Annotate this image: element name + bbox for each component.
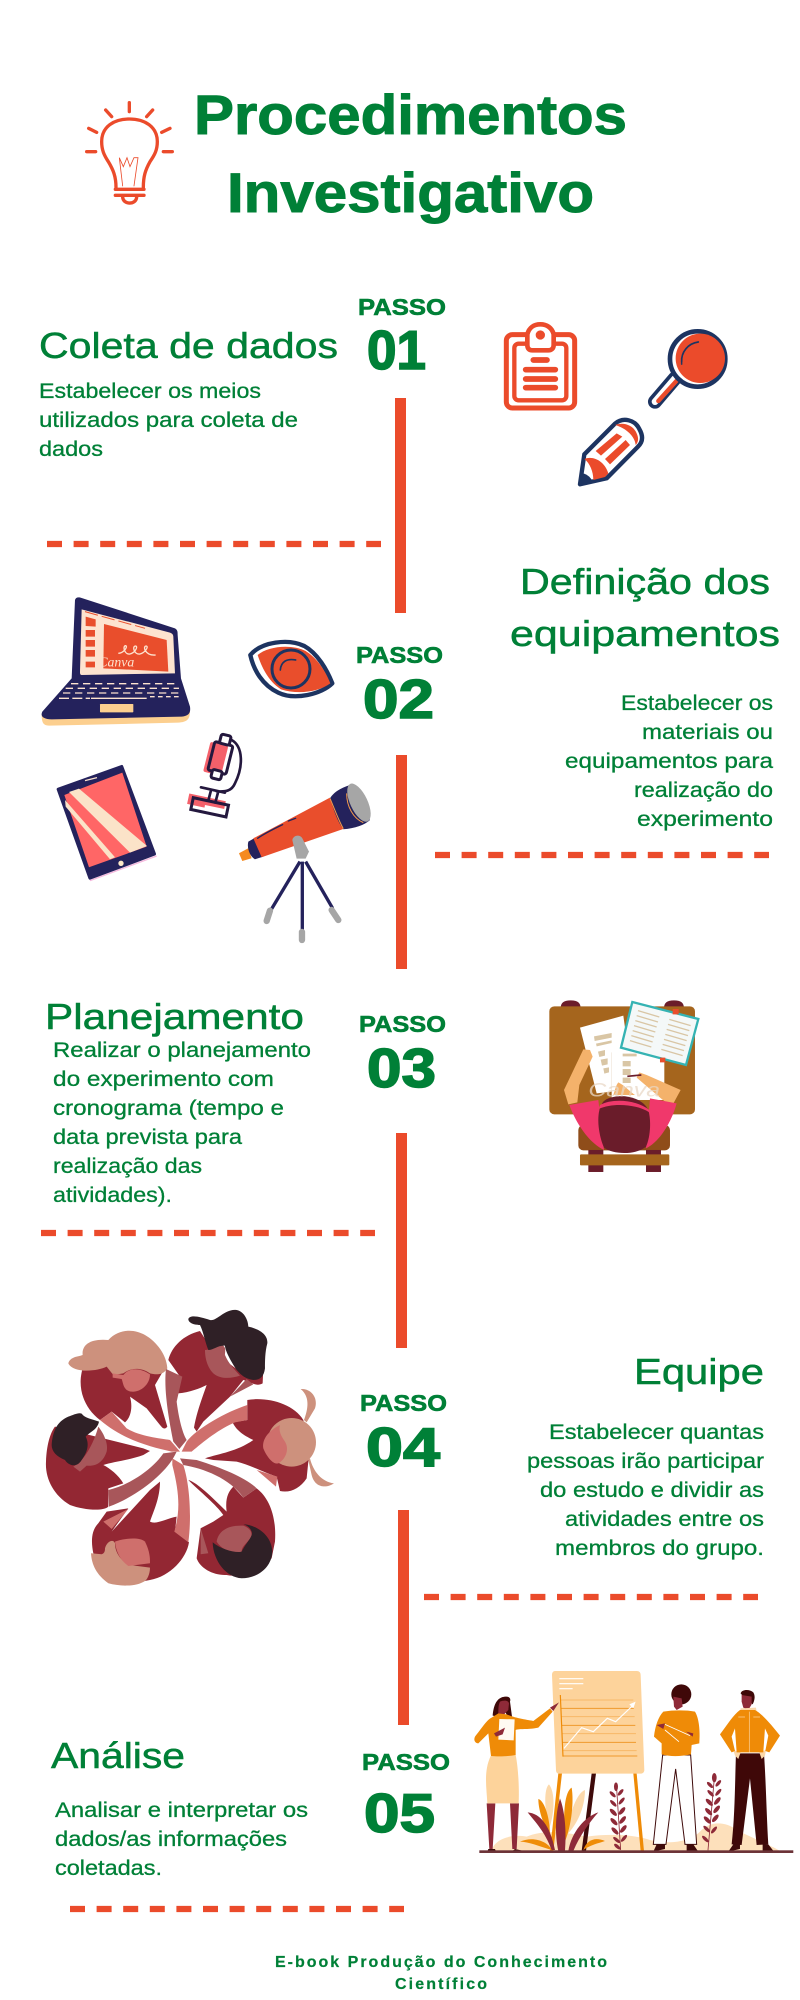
passo 01 label: 01 [367,319,426,381]
footer credit: E-book Produção do Conhecimento [275,1954,607,1971]
heading: planejamento: Planejamento [45,996,304,1037]
passo 02 label: 02 [363,668,434,730]
body: planejamento: realização das [53,1154,202,1178]
passo 05 label: PASSO [362,1749,450,1775]
passo 05 label [362,1749,450,1844]
body: análise: coletadas. [55,1856,162,1880]
heading: equipe: Equipe [634,1351,764,1392]
icon: eye [250,642,332,696]
title: Procedimentos [194,83,627,146]
person right [182,1389,334,1492]
passo 01 label [358,294,446,381]
icon: laptop [42,597,190,726]
passo 03 label: 03 [367,1037,436,1099]
body: definição dos equipamentos: equipamentos para [565,749,773,773]
body: equipe [527,1420,764,1560]
passo 04 label: PASSO [360,1390,447,1416]
heading: definição dos equipamentos: Definição dos [520,561,770,602]
step 1: text [39,294,446,461]
man with hands on hips [720,1690,780,1852]
body: análise [55,1798,308,1880]
person top-left [68,1331,180,1452]
timeline bar 4 [398,1510,409,1725]
body: análise: dados/as informações [55,1827,287,1851]
timeline bar 3 [396,1133,407,1348]
body: planejamento: data prevista para [53,1125,242,1149]
illustration: team presenting a chart [474,1671,793,1853]
timeline bar 5 [70,1906,404,1912]
step 4: text [360,1351,764,1560]
body: planejamento: atividades). [53,1183,172,1207]
heading: coleta de dados: Coleta de dados [39,325,338,366]
body: planejamento [53,1038,311,1207]
person bottom-left [91,1458,190,1586]
illustration: team huddle [46,1310,334,1586]
icon: telescope on tripod [239,780,376,940]
footer credit [275,1954,607,1993]
plants [520,1773,722,1851]
body: coleta de dados: dados [39,437,103,461]
icon: laptop: Canva [98,656,134,671]
body: equipe: do estudo e dividir as [540,1478,764,1502]
person left [46,1413,177,1510]
body: equipe: Estabelecer quantas [549,1420,764,1444]
body: definição dos equipamentos: realização do [634,778,773,802]
icon: microscope [187,734,241,817]
body: equipe: membros do grupo. [555,1536,764,1560]
title [194,83,627,224]
heading: análise: Análise [51,1735,185,1776]
body: coleta de dados: Estabelecer os meios [39,379,261,403]
passo 02 label: PASSO [356,642,443,668]
person top-right [165,1310,267,1449]
heading: definição dos equipamentos [510,561,780,654]
icon: tablet [58,767,157,881]
step 2: text [356,561,780,831]
body: planejamento: do experimento com [53,1067,274,1091]
man with crossed arms [653,1684,700,1852]
body: coleta de dados [39,379,298,461]
passo 05 label: 05 [364,1782,435,1844]
body: coleta de dados: utilizados para coleta de [39,408,298,432]
body: análise: Analisar e interpretar os [55,1798,308,1822]
illustration: person studying at a desk [549,1000,698,1172]
icon: light bulb [87,103,172,203]
passo 03 label: PASSO [359,1011,446,1037]
body: planejamento: Realizar o planejamento [53,1038,311,1062]
timeline bar 2 [396,755,407,969]
icons: clipboard, magnifier, pencil [506,324,725,484]
title: Investigativo [227,161,594,224]
passo 04 label [360,1390,447,1478]
body: equipe: atividades entre os [565,1507,764,1531]
footer credit: Científico [395,1976,487,1993]
icon: pencil [580,420,642,484]
passo 01 label: PASSO [358,294,446,320]
icon: magnifier [655,331,725,402]
body: definição dos equipamentos [565,691,773,831]
illustration: person studying at a desk: Canva [588,1081,660,1102]
body: equipe: pessoas irão participar [527,1449,764,1473]
heading: definição dos equipamentos: equipamentos [510,613,780,654]
passo 02 label [356,642,443,730]
timeline bar 1 [395,398,406,613]
body: definição dos equipamentos: materiais ou [642,720,773,744]
flip chart [550,1671,644,1851]
body: planejamento: cronograma (tempo e [53,1096,284,1120]
body: definição dos equipamentos: Estabelecer os [621,691,773,715]
step 3: text [45,996,446,1207]
person bottom-right [180,1458,275,1578]
icon: clipboard [506,324,575,408]
passo 04 label: 04 [366,1416,440,1478]
passo 03 label [359,1011,446,1099]
step 5: text [51,1735,450,1880]
body: definição dos equipamentos: experimento [637,807,773,831]
woman presenter [474,1697,559,1852]
illustrations: equipment [42,597,376,940]
